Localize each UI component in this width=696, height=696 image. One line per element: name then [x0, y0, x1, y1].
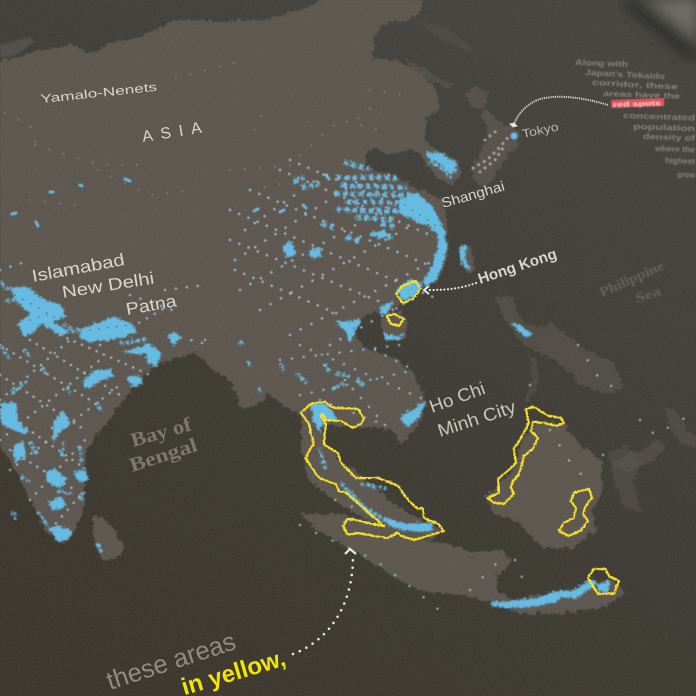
cluster: Hanoi delta: [335, 318, 360, 340]
label: Sea: Sea: [634, 285, 663, 307]
text block: right margin note: Along with: [575, 58, 628, 69]
label: Hong Kong: Hong Kong: [476, 246, 559, 288]
label: Yamalo-Nenets: Yamalo-Nenets: [40, 80, 158, 106]
text block: right margin note: Japan's Tokaido: [585, 68, 665, 81]
text block: right margin note: corridor, these: [592, 78, 679, 92]
Japan dots in pink: [473, 128, 510, 172]
scattered settlement dots: Siberia and central Asia: [5, 60, 405, 205]
cluster: eastern India: [82, 368, 112, 386]
water labels: [127, 259, 667, 477]
cluster: Mumbai and west coast: [0, 402, 28, 432]
text block: right margin note: where the: [654, 144, 696, 154]
land: mainland Asia: [0, 0, 460, 542]
caption: these areas: these areas: [103, 626, 239, 696]
outline: Pearl River Delta: [395, 280, 420, 302]
place labels: [30, 80, 560, 441]
text block: right margin note: highest: [665, 156, 696, 166]
land: Japan: [470, 107, 520, 187]
dense dots: northern China plain: [292, 160, 425, 240]
label: Philippine: Philippine: [598, 259, 667, 301]
label: Tokyo: Tokyo: [521, 119, 560, 141]
cluster: south India: [45, 468, 65, 487]
label: Islamabad: Islamabad: [30, 250, 126, 286]
arrow: note to Tokyo: [510, 97, 608, 127]
land: New Guinea edge: [664, 404, 696, 446]
yellow outlined areas: [300, 280, 618, 593]
cluster: east coast: [422, 224, 445, 285]
arctic ice patch: [0, 37, 34, 58]
outline: southeast Borneo: [558, 488, 591, 535]
land: Sumatra and Java: [298, 512, 624, 612]
label: Shanghai: Shanghai: [439, 178, 506, 211]
scattered settlement dots: Southeast Asia: [205, 340, 690, 615]
land: Hokkaido: [463, 83, 487, 107]
text block: right margin note: density of: [643, 132, 696, 143]
land: Kamchatka sliver: [417, 20, 473, 52]
scattered settlement dots: China: [230, 160, 440, 345]
outline: Bali and Lombok: [587, 568, 618, 593]
label: Bay of: Bay of: [128, 413, 194, 452]
land: Sri Lanka: [90, 515, 124, 558]
land: Sulawesi: [606, 446, 640, 510]
text block: right margin note: [575, 58, 696, 180]
text block: right margin note: grow: [677, 170, 696, 180]
page shadow and corner: [625, 0, 696, 58]
cluster: Guangdong: [396, 278, 420, 298]
cluster: Pakistan and Punjab: [10, 285, 68, 334]
cluster: South Korea: [424, 152, 455, 172]
text block: right margin note: red spots: [613, 100, 661, 109]
arrow: Hong Kong label to delta: [424, 283, 476, 294]
label: Minh City: Minh City: [435, 397, 518, 441]
land-coloured gaps in clusters: [15, 205, 435, 330]
land: eastern Indonesia: [606, 437, 665, 470]
urban density clusters in blue: [0, 152, 608, 606]
highlight: red spots: [611, 98, 664, 108]
small blue towns: Siberia and central Asia: [12, 175, 329, 226]
label: Ho Chi: Ho Chi: [427, 378, 488, 417]
cluster: Manila: [511, 322, 530, 336]
cluster: Java: [490, 578, 595, 606]
cluster: Bangkok: [310, 402, 335, 430]
cluster: Malay strait: [385, 517, 430, 530]
cluster: Ganges plain: [78, 316, 135, 340]
streaky blue settlements: [0, 160, 450, 552]
text block: right margin note: population: [633, 122, 695, 133]
cluster: Yangtze delta and Shanghai: [398, 192, 440, 232]
label: Bengal: Bengal: [127, 434, 201, 477]
label: New Delhi: New Delhi: [61, 269, 155, 302]
land: Palawan: [523, 353, 537, 403]
text block: right margin note: concentrated: [623, 111, 695, 123]
text block: right margin note: areas have the: [603, 89, 681, 101]
icon: Tokyo blue glow: [510, 132, 518, 140]
land: Taiwan: [458, 243, 474, 270]
land: Philippines: [493, 293, 623, 392]
land: Borneo: [484, 420, 600, 547]
label: ASIA: ASIA: [141, 119, 209, 146]
cluster: Bangladesh: [122, 342, 160, 365]
cluster: Bali: [596, 580, 608, 590]
arrow: yellow areas caption to Sumatra: [293, 549, 356, 654]
scattered settlement dots: India: [0, 262, 210, 530]
outline: Hainan coast: [386, 313, 403, 325]
cluster: Taiwan: [459, 244, 469, 268]
cluster: Sichuan basin: [281, 240, 294, 257]
land: Sakhalin and Kuriles: [403, 57, 453, 86]
outline: western Borneo: [487, 406, 563, 503]
cluster: Ho Chi Minh delta: [398, 400, 424, 425]
label: Patna: Patna: [124, 291, 179, 319]
outline: Malay Peninsula and Sumatra: [300, 401, 443, 539]
